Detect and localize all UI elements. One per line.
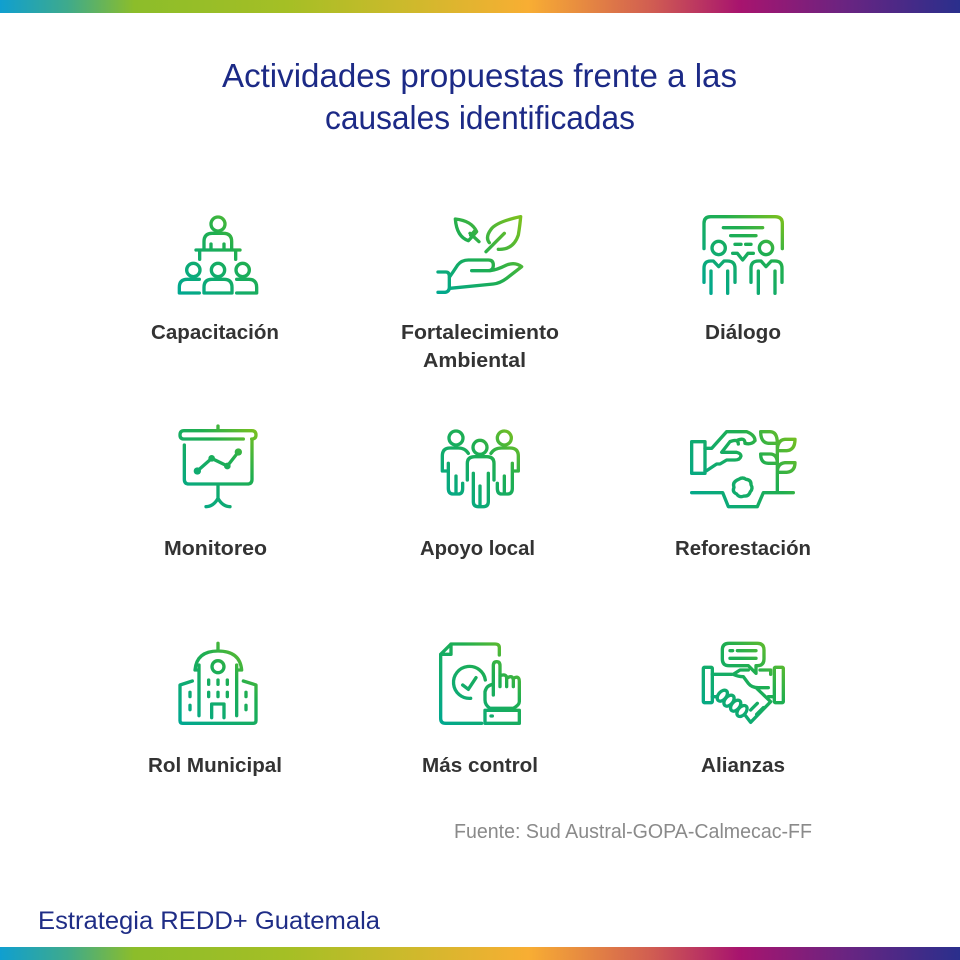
label: Más control: Más control xyxy=(422,755,538,777)
label: Rol Municipal: Rol Municipal xyxy=(148,755,282,777)
icon: reforestación xyxy=(692,432,795,507)
label: Apoyo local: Apoyo local xyxy=(420,538,535,560)
icon: alianzas xyxy=(703,643,783,722)
title: causales identificadas xyxy=(325,99,635,136)
icon: más control xyxy=(441,644,519,723)
label: Fortalecimiento Ambiental: Ambiental xyxy=(423,350,526,372)
icon: monitoreo xyxy=(180,426,256,507)
label: Alianzas: Alianzas xyxy=(701,755,785,777)
label: Fortalecimiento Ambiental xyxy=(401,322,559,372)
label: Reforestación: Reforestación xyxy=(675,538,811,560)
source note: Fuente: Sud Austral-GOPA-Calmecac-FF xyxy=(454,821,812,843)
label: Capacitación: Capacitación xyxy=(151,322,279,344)
title xyxy=(222,57,737,136)
icon: fortalecimiento ambiental xyxy=(438,217,522,292)
bottom gradient bar xyxy=(0,947,960,960)
label: Monitoreo: Monitoreo xyxy=(164,538,267,560)
label: Fortalecimiento Ambiental: Fortalecimiento xyxy=(401,322,559,344)
icon: rol municipal xyxy=(180,643,256,723)
icon: diálogo xyxy=(704,217,782,293)
icon: apoyo local xyxy=(442,431,518,507)
title: Actividades propuestas frente a las xyxy=(222,57,737,94)
icon: capacitación xyxy=(179,217,257,293)
label: Diálogo: Diálogo xyxy=(705,322,781,344)
footer brand: Estrategia REDD+ Guatemala xyxy=(38,907,380,935)
top gradient bar xyxy=(0,0,960,13)
